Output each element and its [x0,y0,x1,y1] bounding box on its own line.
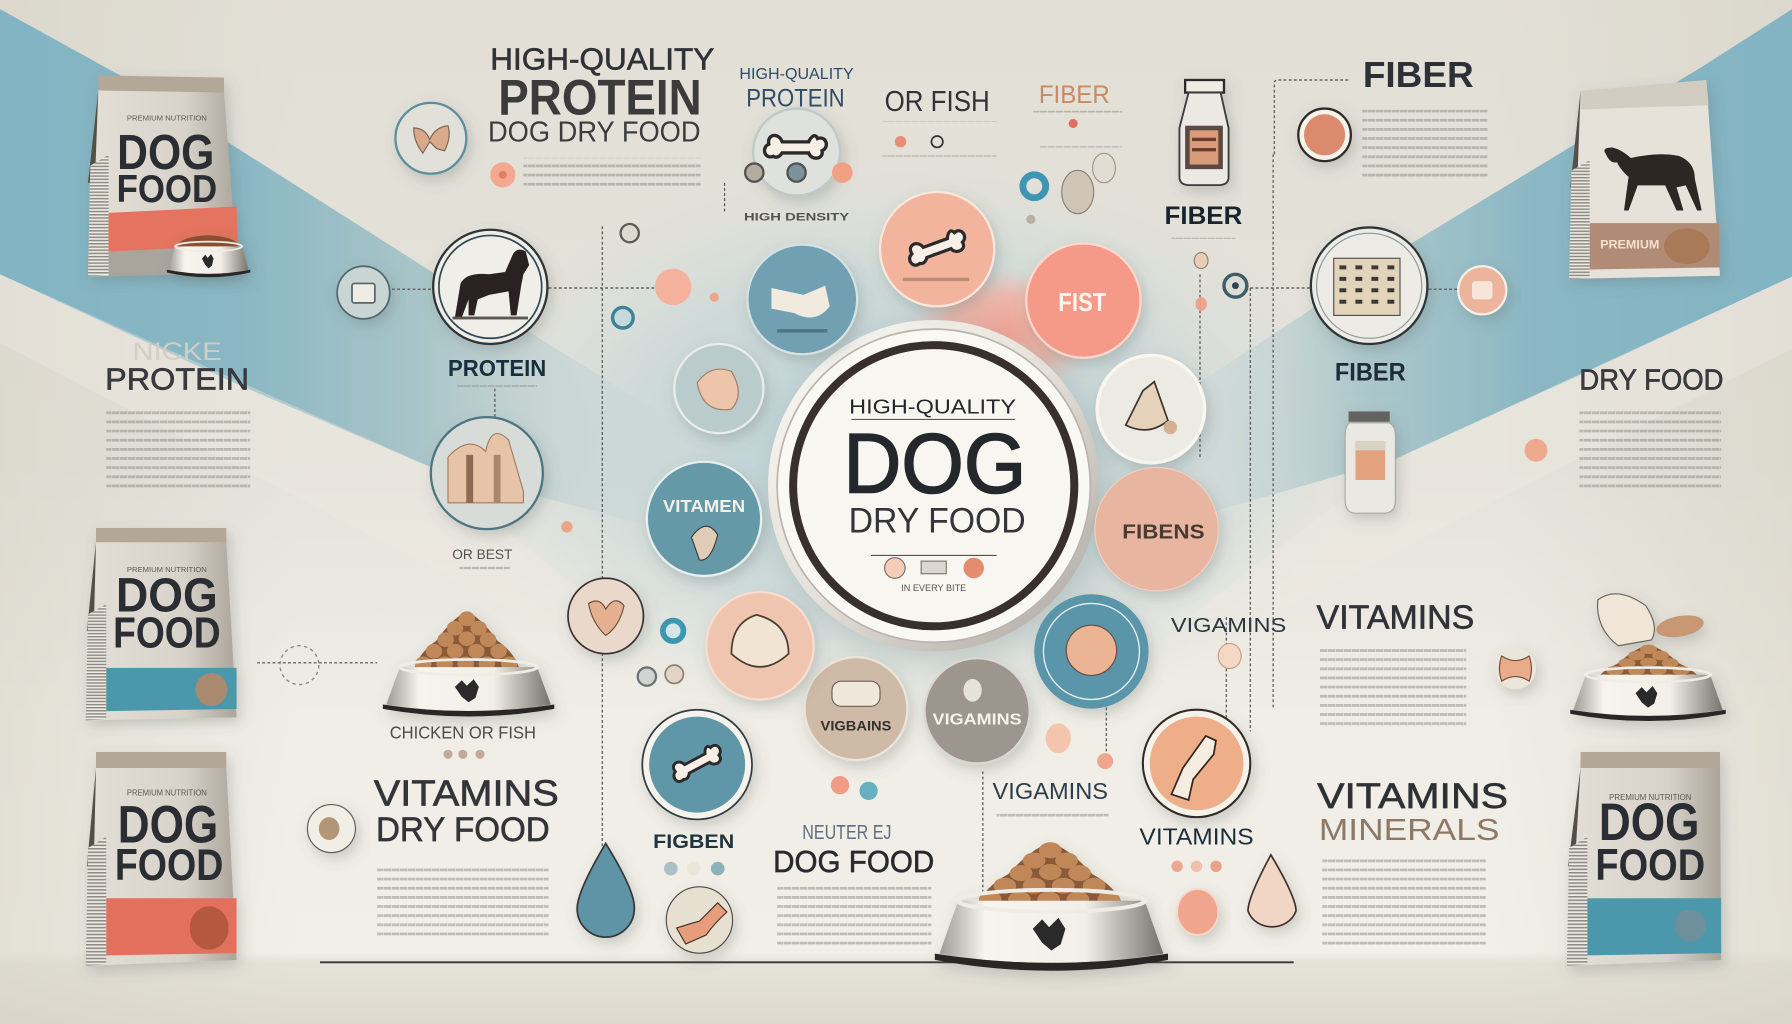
label: vigamins centre: VIGAMINS [993,778,1108,804]
small dots: centre lower [638,621,1241,800]
icon: teal drop [577,843,634,937]
bag: top left: PREMIUM NUTRITION [127,114,207,122]
circle: salmon fist: FIST [1058,287,1106,317]
central icons row [871,555,997,593]
icon: bottle [1179,80,1229,185]
bag: bottom right: FOOD [1595,841,1705,890]
heading: high-quality protein: PROTEIN [498,68,702,125]
circle: gray vitamins [925,658,1030,763]
circle: peach chicken [706,592,814,699]
bag: bottom left: PREMIUM NUTRITION [127,788,207,797]
nutrient circles [568,192,1218,953]
central title text: DRY FOOD [849,501,1026,541]
bag: middle left: PREMIUM NUTRITION [127,566,207,574]
text block: fiber [1362,110,1488,181]
icon: salmon circle lower [1177,889,1218,935]
label: vitamins [1139,824,1254,872]
subheading: high-quality protein small: HIGH-QUALITY [739,66,854,83]
central bowl badge [768,320,1106,661]
icon: bone circle top [745,109,853,195]
circle: teal vitamen: VITAMEN [663,496,745,516]
bag: top left: DOG [117,124,214,180]
label: chicken or fish: CHICKEN OR FISH [390,722,536,742]
heading: fiber orange [1033,81,1122,147]
bag: bottom left: DOG [118,795,218,854]
bag: bottom left: FOOD [115,841,223,890]
label: or best: OR BEST [452,547,513,562]
bag: middle left: FOOD [113,609,221,657]
circle: fibens [1095,467,1218,591]
bag: bottom right: PREMIUM NUTRITION [1609,793,1692,802]
circle: heart chicken [568,578,643,654]
icon: small bowl on top-left bag [167,235,250,277]
heading: dry food right: DRY FOOD [1579,365,1723,397]
subheading: high-quality protein small [739,66,854,112]
text block: dog food [777,887,931,951]
heading: vitamins dry food: DRY FOOD [376,811,550,849]
floor line [320,961,1294,963]
label: figben [653,831,734,875]
small icons cluster [1023,153,1115,224]
small dot right [1525,439,1547,462]
circle: small bone [666,887,733,953]
heading: neuter dog food [773,821,934,879]
bag: top left [88,75,238,276]
heading: vitamins dry food: VITAMINS [374,773,559,814]
heading: nicke protein: NICKE [133,338,222,366]
label: or best [452,547,513,569]
icon: salmon circle [1298,109,1351,161]
icon: fiber chart circle [1311,227,1427,344]
heading: high-quality protein [488,42,714,149]
text block: vitamins [1320,645,1466,731]
icon: peach drop [1248,855,1296,927]
central title text [843,396,1026,541]
label: vigamins centre [993,778,1109,817]
heading: high-quality protein: HIGH-QUALITY [490,42,714,77]
small connector nodes [1194,253,1247,311]
icon: salmon node right [1458,266,1506,314]
heading: vitamins dry food [374,773,559,849]
text block: dry food [1579,409,1721,491]
bag: middle left: DOG [116,568,218,622]
bag: top right with dog [1569,80,1720,279]
heading: high-quality protein: DOG DRY FOOD [488,117,701,149]
bag: middle left [86,528,237,720]
icon: left kibble bowl [383,611,554,717]
heading: neuter dog food: DOG FOOD [773,844,934,879]
icon: jar [1345,411,1395,513]
label: figben: FIGBEN [653,831,734,853]
label: fiber under bottle: FIBER [1165,202,1242,230]
text block: vitamins minerals [1322,859,1486,946]
heading: neuter dog food: NEUTER EJ [802,821,891,844]
central icons row: IN EVERY BITE [901,583,966,593]
circle: beige vitamins: VIGBAINS [821,718,891,734]
icon: protein bars circle [431,417,543,529]
bag: top right with dog: PREMIUM [1600,238,1659,251]
circle: beige vitamins [805,657,907,760]
heading: fiber orange: FIBER [1039,81,1110,109]
label: fiber right: FIBER [1335,359,1406,387]
circle: pale chicken [674,344,763,433]
icon: bone small right [1495,648,1536,689]
circle: teal fish [747,245,857,354]
label: high density: HIGH DENSITY [744,212,850,224]
circle: peach bone [880,192,994,306]
text block: protein [106,409,250,491]
bag: bottom right [1567,752,1721,966]
small connector dots left [561,224,719,533]
heading: nicke protein [105,338,249,397]
heading: or fish [882,86,997,157]
label: protein mid: PROTEIN [448,355,546,381]
text block under top heading [490,158,701,187]
icon: dog circle [433,230,547,344]
small icons under label [443,750,485,759]
icon: connector stamp [280,646,319,685]
icon: small circle vitamins [307,805,355,853]
subheading: high-quality protein small: PROTEIN [746,84,845,112]
circle: teal bone [642,710,752,819]
bag: bottom left [86,752,237,966]
central title text: HIGH-QUALITY [849,396,1016,419]
heading: vitamins minerals: MINERALS [1319,812,1499,847]
heading: or fish: OR FISH [885,86,990,118]
label: vitamins: VITAMINS [1139,824,1254,850]
circle: gray vitamins: VIGAMINS [933,712,1022,729]
main kibble bowl [935,842,1168,971]
central title text: DOG [843,416,1026,511]
heading: nicke protein: PROTEIN [105,362,249,397]
text block: vitamins dry food [377,869,549,939]
circle: salmon fist [1026,243,1141,358]
heading: vitamins minerals [1317,776,1508,847]
icon: small node left of dog [337,266,390,319]
heading: vitamins right: VITAMINS [1317,600,1474,637]
bag: top left: FOOD [117,168,217,211]
heading: vitamins minerals: VITAMINS [1317,776,1508,816]
icon: bone circle left of heading [395,103,466,174]
circle: fibens: FIBENS [1122,520,1205,543]
label: vigamins right: VIGAMINS [1171,614,1286,637]
heading: fiber top right: FIBER [1363,54,1474,95]
circle: white bag [1097,355,1205,463]
icon: peach bone circle [1143,710,1250,817]
circle: teal vitamen [647,462,761,576]
bag: bottom right: DOG [1599,793,1699,852]
circle: teal chicken [1034,594,1149,709]
icon: right bowl with meat [1570,594,1726,721]
connector lines [257,80,1458,937]
